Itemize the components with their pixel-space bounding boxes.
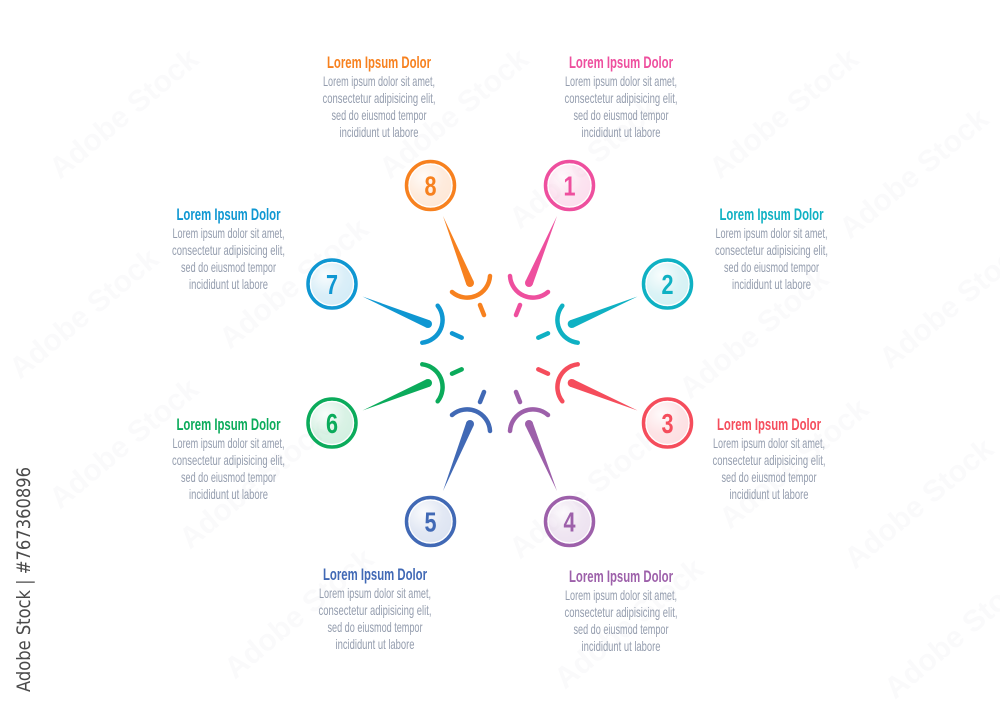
label 7: sed do eiusmod tempor [181, 259, 276, 275]
badge 8 [406, 162, 454, 210]
arc 2 [557, 306, 578, 343]
label 8: Lorem ipsum dolor sit amet, [323, 73, 435, 89]
label 5: Lorem ipsum dolor sit amet, [319, 585, 431, 601]
watermark pattern: Adobe Stock [213, 212, 375, 355]
label 2 [715, 205, 828, 292]
dash 5 [480, 392, 484, 402]
badge 5: 5 [424, 506, 436, 538]
watermark pattern: Adobe Stock [218, 542, 380, 685]
badge 7 [308, 260, 356, 308]
badge 3: 3 [662, 408, 674, 439]
watermark pattern: Adobe Stock [43, 372, 205, 515]
label 7: Lorem ipsum dolor sit amet, [172, 225, 284, 241]
watermark pattern: Adobe Stock [713, 392, 875, 535]
watermark pattern: Adobe Stock [373, 42, 535, 185]
spike 6 [362, 379, 432, 410]
spike 1 [525, 216, 557, 287]
watermark pattern: Adobe Stock [548, 552, 710, 695]
badge 6 [308, 399, 356, 447]
label 2: consectetur adipisicing elit, [715, 242, 828, 258]
label 2: sed do eiusmod tempor [724, 259, 819, 275]
watermark pattern: Adobe Stock [703, 42, 865, 185]
label 4: incididunt ut labore [582, 638, 661, 654]
label 5: Lorem Ipsum Dolor [323, 565, 427, 584]
spike 4 [525, 420, 557, 491]
badge 3 [644, 399, 692, 447]
label 6: incididunt ut labore [189, 486, 268, 502]
label 3: Lorem ipsum dolor sit amet, [713, 435, 825, 451]
badge 5 [406, 498, 454, 546]
label 3: Lorem Ipsum Dolor [717, 415, 821, 434]
dash 8 [480, 305, 484, 315]
segment 2 [538, 260, 692, 343]
label 1: sed do eiusmod tempor [574, 107, 669, 123]
label 3 [712, 415, 826, 502]
badge 8: 8 [424, 170, 436, 202]
stock id label: Adobe Stock | #767360896 [13, 467, 35, 692]
dash 7 [452, 333, 462, 338]
label 6: Lorem ipsum dolor sit amet, [172, 435, 284, 451]
segment 8 [406, 162, 490, 315]
label 8: Lorem Ipsum Dolor [327, 53, 431, 72]
label 5 [318, 565, 432, 652]
label 4 [564, 567, 678, 654]
label 2: incididunt ut labore [732, 276, 811, 292]
spike 2 [568, 296, 638, 328]
badge 1: 1 [564, 170, 576, 202]
label 2: Lorem ipsum dolor sit amet, [716, 225, 828, 241]
dash 1 [516, 305, 520, 315]
label 4: Lorem Ipsum Dolor [569, 567, 673, 586]
label 3: incididunt ut labore [730, 486, 809, 502]
label 6: consectetur adipisicing elit, [172, 452, 285, 468]
spike 5 [443, 420, 474, 491]
badge 6: 6 [326, 408, 338, 439]
label 8: incididunt ut labore [340, 124, 419, 140]
label 1: Lorem Ipsum Dolor [569, 53, 673, 72]
segment 6 [308, 364, 462, 447]
label 4: consectetur adipisicing elit, [564, 604, 678, 620]
badge 7: 7 [326, 269, 338, 300]
badge 4: 4 [564, 506, 576, 538]
label 7: incididunt ut labore [189, 276, 268, 292]
arc 6 [422, 364, 443, 401]
spike 3 [568, 379, 638, 410]
label 4: sed do eiusmod tempor [574, 621, 669, 637]
dash 3 [538, 369, 548, 374]
arc 7 [422, 306, 443, 343]
label 7: Lorem Ipsum Dolor [176, 205, 281, 224]
segment 7 [308, 260, 462, 343]
dash 4 [516, 392, 520, 402]
label 5: consectetur adipisicing elit, [318, 602, 432, 618]
spike 7 [362, 296, 432, 328]
label 2: Lorem Ipsum Dolor [720, 205, 824, 224]
badge 4 [546, 498, 594, 546]
arc 8 [452, 276, 490, 298]
badge 1 [546, 162, 594, 210]
segment 1 [510, 162, 594, 315]
watermark pattern: Adobe Stock [503, 92, 665, 235]
label 3: consectetur adipisicing elit, [712, 452, 826, 468]
arc 5 [452, 409, 490, 431]
watermark pattern: Adobe Stock [838, 432, 1000, 575]
label 3: sed do eiusmod tempor [722, 469, 817, 485]
label 8 [322, 53, 436, 140]
arc 4 [510, 409, 548, 431]
label 6: sed do eiusmod tempor [181, 469, 276, 485]
watermark pattern: Adobe Stock [173, 412, 335, 555]
label 1: consectetur adipisicing elit, [564, 90, 678, 106]
label 1: Lorem ipsum dolor sit amet, [565, 73, 677, 89]
dash 6 [452, 369, 462, 374]
badge 2 [644, 260, 692, 308]
arc 3 [557, 364, 578, 401]
label 8: sed do eiusmod tempor [332, 107, 427, 123]
label 1: incididunt ut labore [582, 124, 661, 140]
arc 1 [510, 276, 548, 298]
watermark pattern: Adobe Stock [3, 242, 165, 385]
label 6: Lorem Ipsum Dolor [176, 415, 281, 434]
watermark pattern: Adobe Stock [43, 42, 205, 185]
segment 4 [510, 392, 594, 546]
label 7 [172, 205, 285, 292]
label 4: Lorem ipsum dolor sit amet, [565, 587, 677, 603]
segment 5 [406, 392, 490, 546]
label 1 [564, 53, 678, 140]
dash 2 [538, 333, 548, 338]
spike 8 [443, 216, 474, 287]
label 7: consectetur adipisicing elit, [172, 242, 285, 258]
label 6 [172, 415, 285, 502]
watermark pattern: Adobe Stock [673, 262, 835, 405]
label 5: incididunt ut labore [336, 636, 415, 652]
label 8: consectetur adipisicing elit, [322, 90, 436, 106]
label 5: sed do eiusmod tempor [328, 619, 423, 635]
segment 3 [538, 364, 692, 447]
watermark pattern: Adobe Stock [833, 102, 995, 245]
watermark pattern: Adobe Stock [503, 422, 665, 565]
badge 2: 2 [662, 269, 674, 300]
